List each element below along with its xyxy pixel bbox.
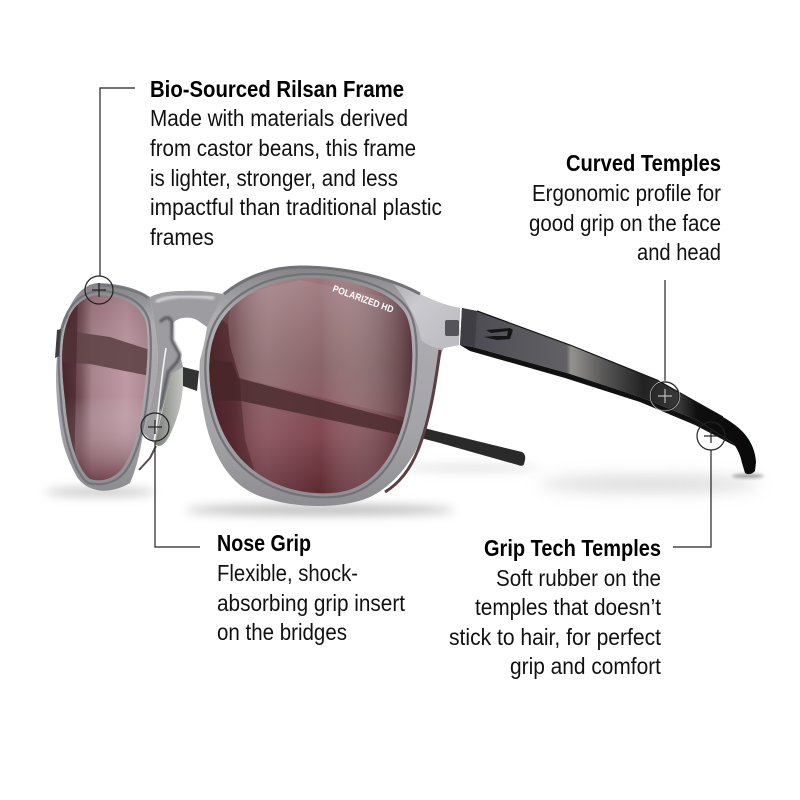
far temple inner section: [183, 367, 199, 391]
text: nose grip: on the bridges: [217, 619, 347, 645]
far temple: [417, 427, 525, 466]
text: grip tech temples: [449, 535, 662, 679]
text: bio-sourced rilsan frame: is lighter, stronger, and less: [150, 165, 398, 191]
left hinge: [55, 329, 61, 358]
inner frame edge: [385, 350, 440, 492]
text: curved temples: [529, 150, 721, 265]
text: bio-sourced rilsan frame: impactful than traditional plastic: [150, 194, 442, 220]
text: grip tech temples: Grip Tech Temples: [484, 535, 661, 561]
text: bio-sourced rilsan frame: Bio-Sourced Rilsan Frame: [150, 76, 404, 102]
text: bio-sourced rilsan frame: frames: [150, 224, 214, 250]
text: bio-sourced rilsan frame: [150, 76, 442, 250]
nose pad: [155, 367, 183, 446]
bridge: [143, 291, 223, 444]
text: bio-sourced rilsan frame: Made with materials derived: [150, 105, 408, 131]
text: nose grip: Nose Grip: [217, 530, 311, 556]
text: nose grip: absorbing grip insert: [217, 590, 406, 616]
callout: curved temples pointer: [650, 280, 680, 411]
text: grip tech temples: grip and comfort: [510, 653, 662, 679]
callout: nose grip pointer: [141, 413, 200, 547]
text: curved temples: good grip on the face: [529, 210, 721, 236]
ground shadows: [45, 465, 764, 515]
text: nose grip: Flexible, shock-: [217, 560, 358, 586]
lens marking: POLARIZED HD: [331, 283, 395, 316]
text: grip tech temples: stick to hair, for perfect: [449, 624, 662, 650]
sunglasses: [55, 266, 756, 506]
callout: grip tech temples pointer: [673, 422, 725, 547]
left lens rim: [59, 291, 151, 484]
text: curved temples: Ergonomic profile for: [532, 180, 721, 206]
text: curved temples: Curved Temples: [566, 150, 721, 176]
big lens rim: [205, 274, 417, 497]
right side of frame: [199, 266, 460, 506]
text: grip tech temples: temples that doesn’t: [475, 594, 662, 620]
left side of frame: [56, 283, 158, 491]
left lens: [60, 290, 150, 480]
temple: [460, 308, 756, 474]
callout: bio-sourced frame pointer: [85, 88, 135, 304]
temple logo: [484, 328, 513, 340]
text: nose grip: [217, 530, 406, 645]
text: bio-sourced rilsan frame: from castor beans, this frame: [150, 135, 416, 161]
text: curved temples: and head: [637, 239, 721, 265]
big lens: [200, 278, 416, 495]
hinge block: [445, 320, 459, 336]
text: grip tech temples: Soft rubber on the: [496, 565, 661, 591]
